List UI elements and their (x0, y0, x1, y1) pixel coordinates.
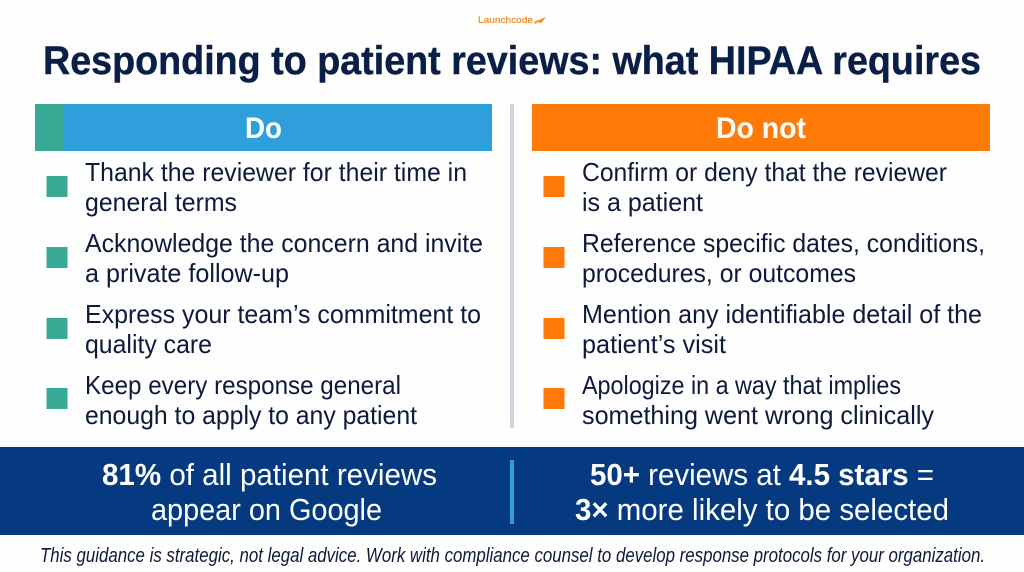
stat: 81% on Google: appear on Google (151, 492, 382, 527)
title: Responding to patient reviews: what HIPAA requires (43, 39, 981, 83)
Do item 1: general terms (85, 187, 237, 217)
Do item 1 (46, 157, 467, 217)
Do item 4 (46, 370, 418, 430)
Do not item 4 (544, 370, 934, 430)
Do not item 1 (544, 157, 947, 217)
Do not item 1: is a patient (582, 187, 704, 217)
Do not item 2: Reference specific dates, conditions, (582, 228, 985, 258)
Do item 3: quality care (85, 329, 212, 359)
Do not item 4: Apologize in a way that implies (582, 370, 901, 400)
Do not header bar: Do not (716, 112, 806, 145)
Do not item 4: something went wrong clinically (582, 400, 934, 430)
Do item 3: Express your team’s commitment to (85, 299, 481, 329)
panel: Do not (532, 104, 990, 430)
Do item 1: Thank the reviewer for their time in (85, 157, 467, 187)
Do item 2: Acknowledge the concern and invite (85, 228, 483, 258)
Do not item 3: patient’s visit (582, 329, 727, 359)
Do header bar (35, 104, 492, 151)
Do not item 2: procedures, or outcomes (582, 258, 856, 288)
stat: 81% on Google (102, 457, 437, 527)
Do item 4: enough to apply to any patient (85, 400, 418, 430)
Do header bar: Do (245, 112, 282, 145)
Do item 2 (46, 228, 483, 288)
Do not item 1: Confirm or deny that the reviewer (582, 157, 947, 187)
Do not item 3: Mention any identifiable detail of the (582, 299, 982, 329)
Do item 4: Keep every response general (85, 370, 401, 400)
stat: 50+ reviews (575, 457, 949, 527)
stat: 81% on Google: 81% of all patient reviews (102, 457, 437, 492)
stat: 50+ reviews: 50+ reviews at 4.5 stars = (590, 457, 934, 492)
panel: Do (35, 104, 492, 430)
Do not item 2 (544, 228, 985, 288)
stat: 50+ reviews: 3× more likely to be selected (575, 492, 949, 527)
Do item 2: a private follow-up (85, 258, 289, 288)
Do not item 3 (544, 299, 982, 359)
Do item 3 (46, 299, 481, 359)
Do not header bar (532, 104, 990, 151)
stats banner (0, 447, 1024, 535)
logo: Launchcode: Launchcode (478, 15, 533, 26)
